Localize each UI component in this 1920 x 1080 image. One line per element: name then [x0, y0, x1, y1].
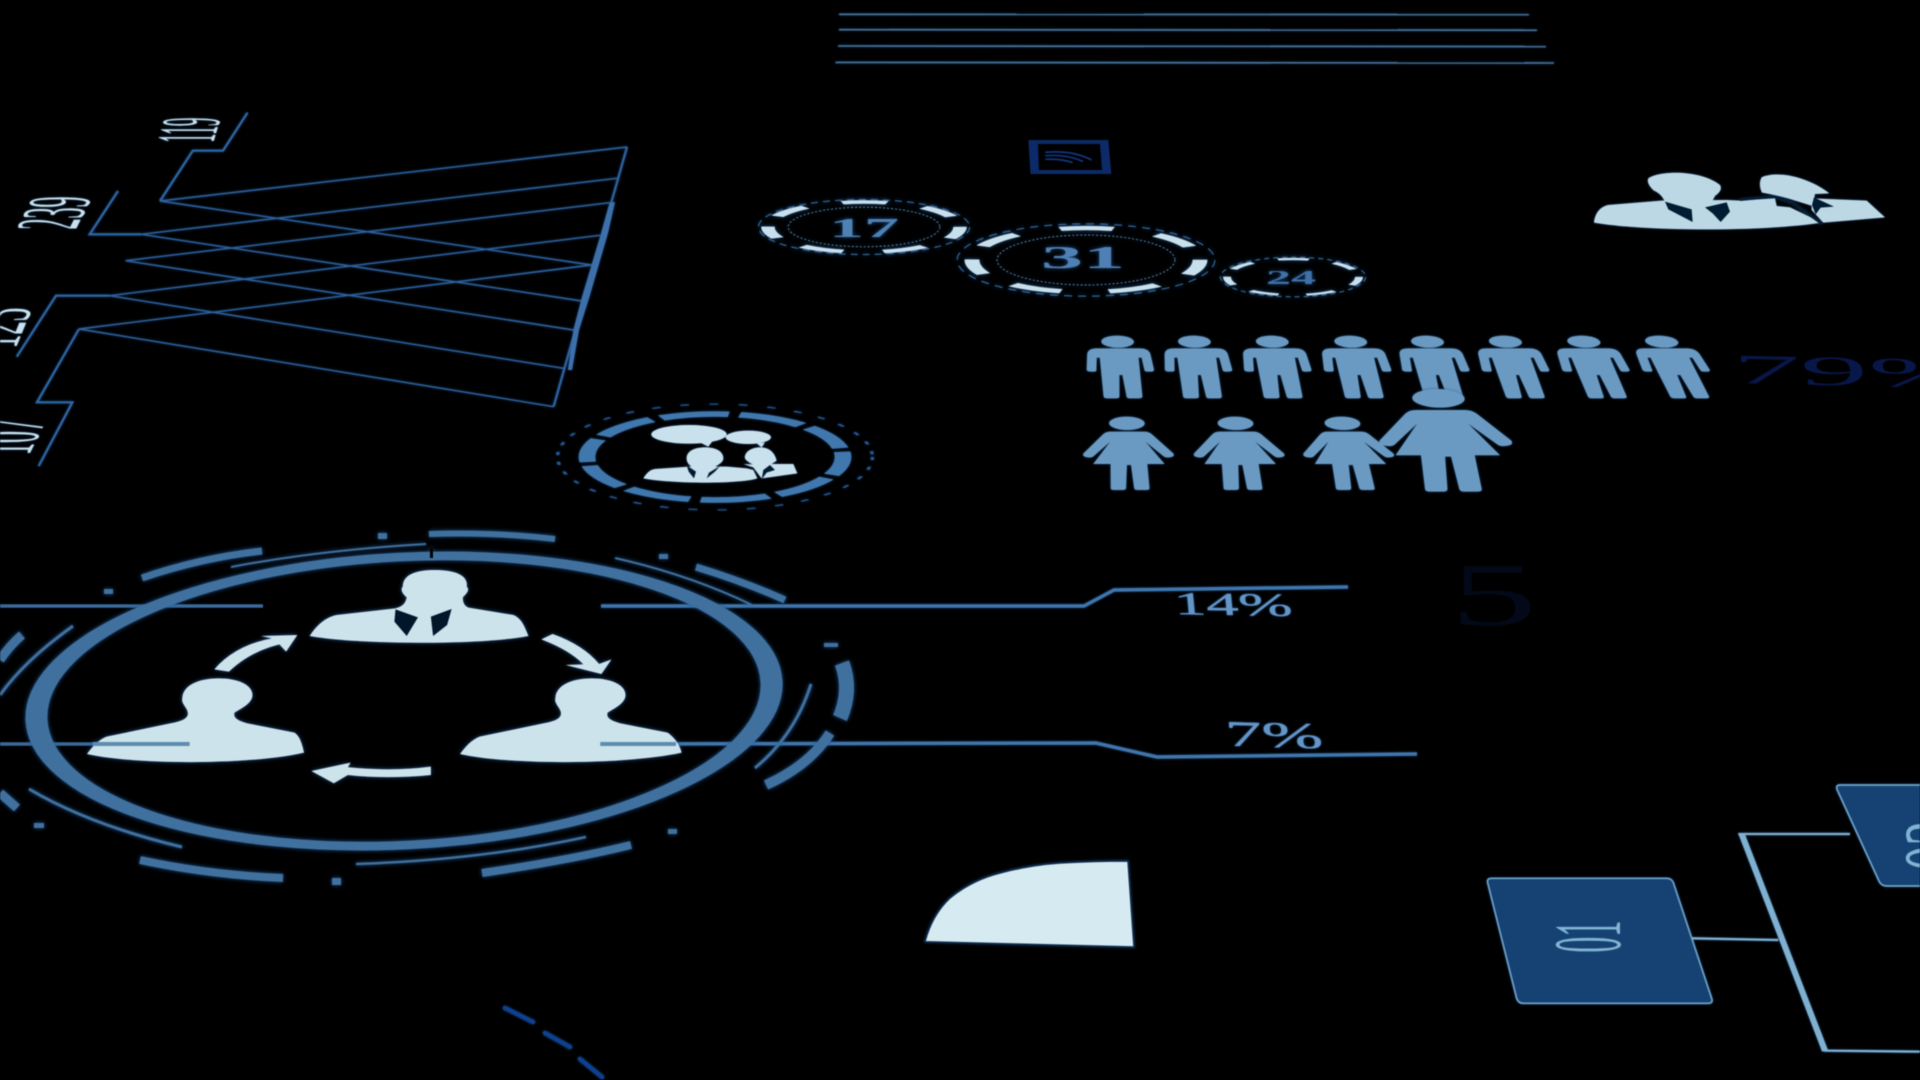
chart grid lines — [79, 147, 627, 407]
label: 14%: 14% — [1172, 586, 1294, 623]
badge: 24 — [1220, 257, 1366, 297]
chart labels — [0, 118, 240, 455]
label: 119: 119 — [139, 118, 240, 142]
box: 01: 01 — [1534, 921, 1641, 953]
person: right — [460, 678, 682, 762]
label: 239: 239 — [0, 197, 113, 229]
icon: wifi monitor — [1028, 140, 1111, 174]
chart: pie slice — [925, 861, 1134, 947]
person: left — [87, 678, 304, 762]
badge value 17: 17 — [829, 214, 899, 243]
pictogram: women row — [1081, 389, 1520, 492]
main ring — [29, 538, 779, 864]
arc: bottom dashes — [505, 1008, 602, 1077]
connector line: 14% — [601, 587, 1348, 606]
icon: people group top right — [1594, 173, 1885, 229]
panel: header lines — [836, 14, 1554, 63]
arrow: right to left — [311, 763, 431, 783]
box: 01 — [1487, 878, 1712, 1003]
badge: 31 — [957, 224, 1215, 296]
arrow: left to top — [214, 635, 297, 672]
top ring notch — [430, 548, 433, 558]
chart right edge — [554, 147, 627, 407]
speech badge rings — [558, 404, 872, 510]
badge value 24: 24 — [1266, 267, 1316, 289]
faint numeral: 5: 5 — [1450, 545, 1537, 645]
panel: org chart — [1487, 785, 1920, 1052]
arrow: top to right — [541, 634, 611, 674]
connector line: 7% — [601, 743, 1417, 757]
icon: speech badge — [558, 404, 872, 510]
label: 7%: 7% — [1224, 714, 1324, 756]
org bracket — [1692, 834, 1920, 1052]
box: 03 — [1837, 785, 1920, 886]
chart leader lines — [17, 113, 247, 466]
pictogram: men row — [1083, 336, 1724, 398]
ring tick dots — [34, 533, 838, 885]
person: top — [310, 570, 528, 643]
speech badge people — [643, 425, 797, 483]
badge value 31: 31 — [1041, 239, 1125, 275]
outer ring arcs — [0, 534, 847, 878]
chart: perspective line chart — [17, 113, 627, 466]
panel: team cycle diagram — [0, 533, 847, 885]
connector line: left stubs — [0, 606, 263, 744]
badge: 17 — [758, 200, 970, 254]
team people and arrows — [87, 570, 682, 783]
